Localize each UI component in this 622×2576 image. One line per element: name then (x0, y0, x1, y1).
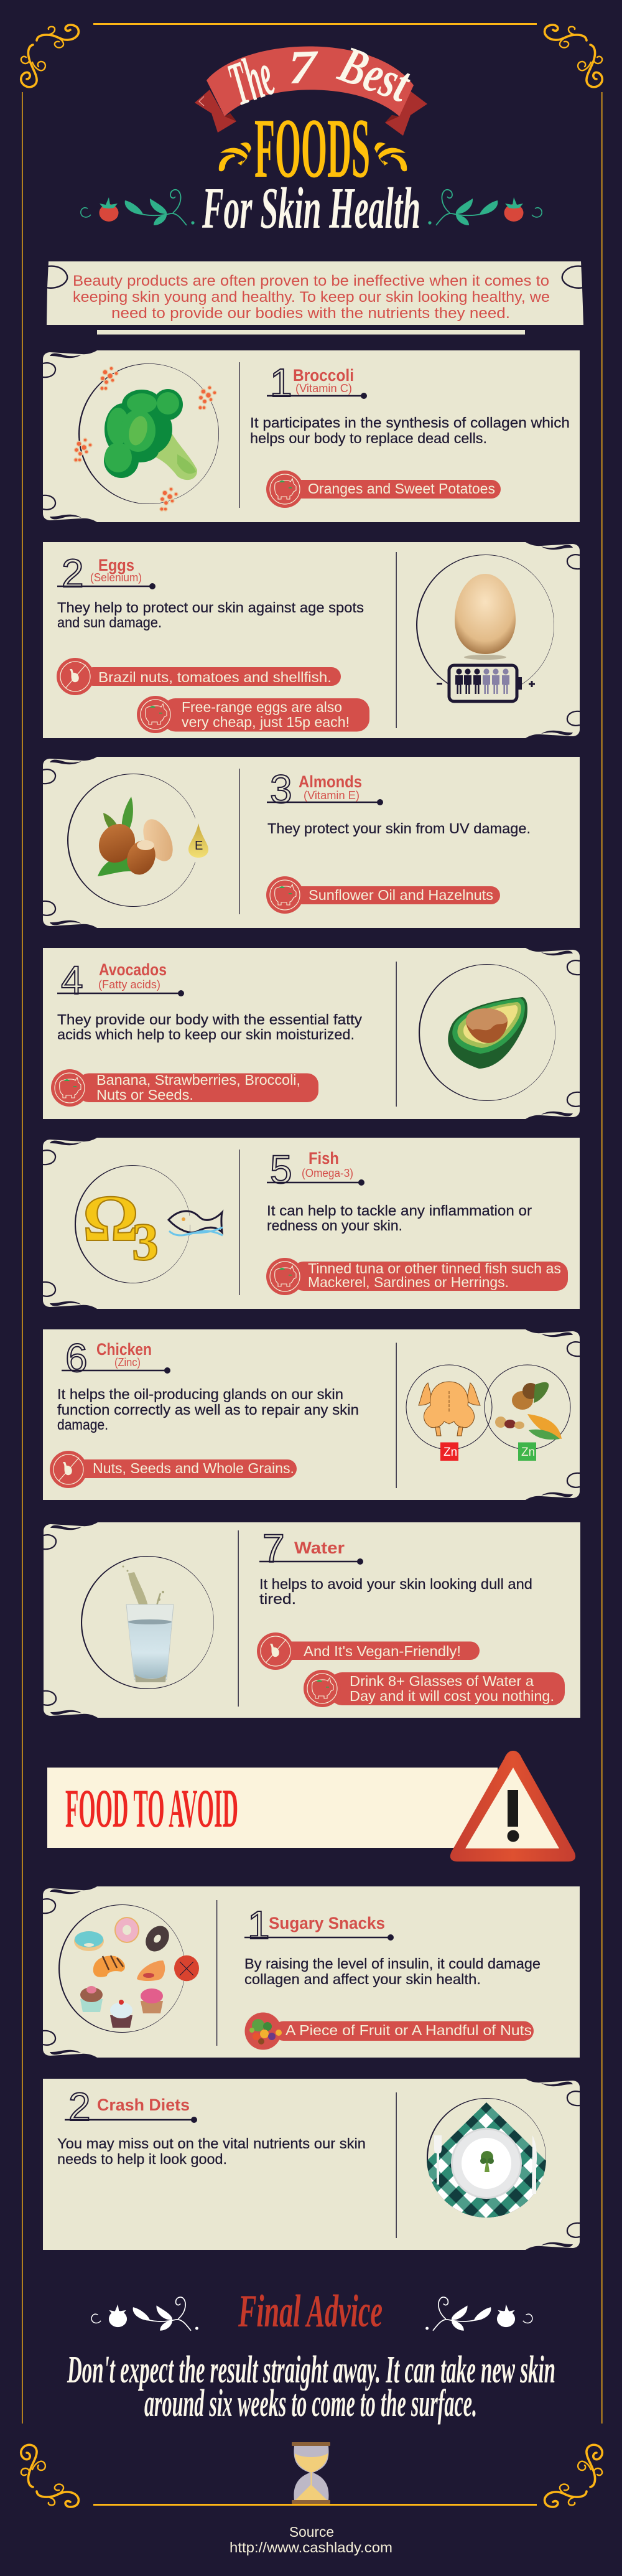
text: chicken description (57, 1386, 359, 1433)
callout: banana, strawberries: Banana, Strawberries, Broccoli, (96, 1072, 300, 1088)
panel: 6 chicken (43, 1328, 581, 1501)
callout: tinned tuna: Tinned tuna or other tinned fish such as (308, 1260, 561, 1276)
heading: fish: 5 (270, 1147, 292, 1192)
title: FOODS (254, 101, 370, 195)
intro text (73, 273, 550, 322)
icon: avocado in circle (419, 964, 555, 1101)
heading: almonds: 3 (270, 767, 292, 812)
icon: omega 3 and fish: Ω (83, 1182, 139, 1255)
text: chicken description: function correctly as well as to repair any skin (57, 1402, 359, 1418)
heading: water: 7 (262, 1526, 285, 1571)
text: eggs description: They help to protect our skin against age spots (57, 599, 364, 616)
heading: crash diets (65, 2084, 197, 2129)
text: crash diets description: needs to help it look good. (57, 2151, 227, 2167)
heading: chicken: (Zinc) (114, 1356, 141, 1369)
heading: sugary snacks: 1 (248, 1903, 270, 1947)
panel: 1 broccoli (42, 349, 580, 523)
text: water description: tired. (259, 1591, 296, 1607)
text: crash diets description (57, 2135, 366, 2167)
heading: chicken: Chicken (96, 1340, 152, 1359)
callout: banana, strawberries: Nuts or Seeds. (96, 1087, 193, 1103)
text: final advice message (67, 2349, 555, 2425)
title line: The 7 Best (220, 35, 418, 119)
panel: 7 water (42, 1521, 580, 1719)
text: water description: It helps to avoid your skin looking dull and (259, 1576, 532, 1592)
icon: fruit and vegetables (249, 2019, 282, 2044)
heading: broccoli: Broccoli (293, 366, 354, 385)
text: chicken description: It helps the oil-producing glands on our skin (57, 1386, 343, 1402)
heading: fish: (Omega-3) (302, 1167, 353, 1179)
decoration: white tomato and leaves right (425, 2297, 532, 2331)
heading: eggs (57, 551, 156, 596)
heading: crash diets: 2 (68, 2084, 91, 2129)
heading: fish: Fish (309, 1149, 339, 1168)
heading: sugary snacks: Sugary Snacks (269, 1914, 385, 1932)
text: chicken description: damage. (57, 1417, 108, 1433)
text: broccoli description: It participates in the synthesis of collagen which (250, 415, 570, 431)
text: fish description: It can help to tackle any inflammation or (267, 1202, 532, 1219)
heading: almonds (267, 767, 383, 812)
text: sugary snacks description: collagen and affect your skin health. (244, 1971, 481, 1987)
heading: water: Water (294, 1539, 345, 1557)
heading: final advice: Final Advice (238, 2286, 383, 2337)
heading: broccoli (267, 360, 367, 405)
text: avocados description: acids which help to keep our skin moisturized. (57, 1026, 355, 1042)
text: broccoli description (250, 415, 570, 446)
callout: brazil nuts: Brazil nuts, tomatoes and shellfish. (98, 669, 332, 685)
banner: food to avoid (47, 1751, 575, 1862)
icon: sweets in circle (58, 1904, 199, 2033)
icon: broccoli in circle (74, 363, 219, 511)
icon: egg with battery (416, 555, 554, 701)
heading: fish (267, 1147, 364, 1192)
text: eggs description (57, 599, 364, 630)
text: eggs description: and sun damage. (57, 614, 162, 630)
ornament: top right (545, 25, 602, 87)
text: almonds description: They protect your skin from UV damage. (267, 820, 531, 836)
callout: free-range eggs (137, 696, 369, 733)
icon: yellow splash left (219, 143, 251, 171)
callout: fruit or nuts: A Piece of Fruit or A Handful of Nuts (285, 2022, 532, 2038)
icon: hourglass (292, 2442, 330, 2504)
callout: sunflower oil and hazelnuts: Sunflower Oil and Hazelnuts (309, 887, 493, 903)
text: sugary snacks description: By raising the level of insulin, it could damage (244, 1955, 541, 1972)
ribbon banner (195, 46, 427, 136)
heading: chicken (62, 1336, 170, 1380)
callout: vegan friendly: And It's Vegan-Friendly! (304, 1643, 461, 1659)
panel: avoid 2 crash diets (43, 2077, 581, 2251)
text: avocados description (57, 1011, 363, 1042)
source: Source (289, 2524, 334, 2540)
intro text: Beauty products are often proven to be ineffective when it comes to (73, 273, 549, 289)
callout: drink 8+ glasses: Day and it will cost you nothing. (350, 1688, 554, 1704)
source: http://www.cashlady.com (230, 2539, 392, 2555)
callout: fruit or nuts (245, 2013, 534, 2050)
intro text: need to provide our bodies with the nutrients they need. (111, 305, 510, 322)
heading: avocados: (Fatty acids) (98, 978, 160, 991)
icon: almonds with vitamin E drop (67, 774, 208, 907)
callout: nuts, seeds and whole grains (50, 1451, 297, 1488)
callout: brazil nuts (57, 658, 341, 695)
source (230, 2524, 392, 2555)
icon: omega 3 and fish (75, 1165, 223, 1283)
panel: 2 eggs (43, 541, 581, 739)
banner: food to avoid: FOOD TO AVOID (65, 1779, 238, 1839)
heading: eggs: 2 (62, 551, 84, 596)
heading: crash diets: Crash Diets (97, 2096, 190, 2114)
callout: free-range eggs: Free-range eggs are also (182, 699, 342, 715)
panel: 3 almonds (42, 756, 580, 929)
icon: plate with tiny broccoli (427, 2098, 546, 2222)
heading: avocados: 4 (61, 958, 83, 1003)
panel: 4 avocados (43, 947, 581, 1120)
icon: chicken in circle with zinc label: Zn (443, 1446, 457, 1459)
text: sugary snacks description (244, 1955, 541, 1987)
callout: sunflower oil and hazelnuts (266, 876, 500, 914)
callout: tinned tuna: Mackerel, Sardines or Herrings. (308, 1274, 509, 1290)
text: broccoli description: helps our body to replace dead cells. (250, 430, 487, 446)
heading: water (259, 1526, 363, 1571)
decoration: tomato and leaves right (428, 190, 542, 225)
callout: oranges and sweet potatoes (266, 471, 501, 508)
callout: oranges and sweet potatoes: Oranges and Sweet Potatoes (308, 480, 495, 497)
panel: 5 fish (42, 1136, 580, 1310)
decoration: tomato and leaves left (81, 190, 195, 225)
title line: The 7 Best: The (220, 40, 282, 119)
icon: almonds with vitamin E drop: E (195, 839, 203, 853)
heading: broccoli: (Vitamin C) (295, 382, 352, 395)
panel: avoid 1 sugary snacks (42, 1885, 580, 2059)
heading: avocados (57, 958, 184, 1003)
title line: For Skin Health: For Skin Health (202, 176, 420, 241)
callout: nuts, seeds and whole grains: Nuts, Seeds and Whole Grains. (93, 1460, 294, 1476)
callout: vegan friendly (257, 1632, 480, 1670)
icon: yellow splash right (374, 143, 407, 171)
heading: almonds: Almonds (299, 772, 362, 791)
icon: omega 3 and fish: 3 (132, 1212, 159, 1272)
decoration: white tomato and leaves left (91, 2297, 198, 2331)
callout: free-range eggs: very cheap, just 15p each! (182, 714, 350, 730)
icon: glass of water in circle (81, 1556, 214, 1689)
text: fish description (267, 1202, 532, 1234)
heading: eggs: (Selenium) (90, 571, 142, 584)
title line: The 7 Best: 7 (287, 40, 320, 94)
panel: intro (46, 261, 583, 325)
icon: nuts and grains in circle with zinc label: Zn (521, 1446, 535, 1459)
text: water description (259, 1576, 532, 1607)
ornament: bottom right (545, 2445, 602, 2507)
icon: nuts and grains in circle with zinc label (485, 1365, 570, 1461)
heading: avocados: Avocados (99, 960, 167, 979)
ornament: top left (21, 25, 78, 87)
text: avocados description: They provide our body with the essential fatty (57, 1011, 363, 1028)
callout: banana, strawberries (51, 1069, 318, 1107)
callout: tinned tuna (266, 1258, 568, 1295)
text: fish description: redness on your skin. (267, 1217, 402, 1234)
icon: chicken in circle with zinc label (406, 1365, 492, 1461)
text: crash diets description: You may miss out on the vital nutrients our skin (57, 2135, 366, 2152)
callout: drink 8+ glasses (304, 1670, 565, 1707)
heading: almonds: (Vitamin E) (304, 789, 360, 802)
callout: drink 8+ glasses: Drink 8+ Glasses of Water a (350, 1673, 534, 1689)
intro text: keeping skin young and healthy. To keep our skin looking healthy, we (73, 289, 550, 306)
icon: warning triangle (450, 1751, 575, 1862)
ornament: bottom left (21, 2445, 78, 2507)
heading: chicken: 6 (65, 1336, 88, 1380)
heading: sugary snacks (244, 1903, 394, 1947)
title line: The 7 Best: Best (332, 35, 418, 114)
title (81, 35, 542, 241)
heading: eggs: Eggs (98, 556, 134, 574)
section: final advice (67, 2286, 555, 2425)
heading: broccoli: 1 (270, 360, 292, 405)
